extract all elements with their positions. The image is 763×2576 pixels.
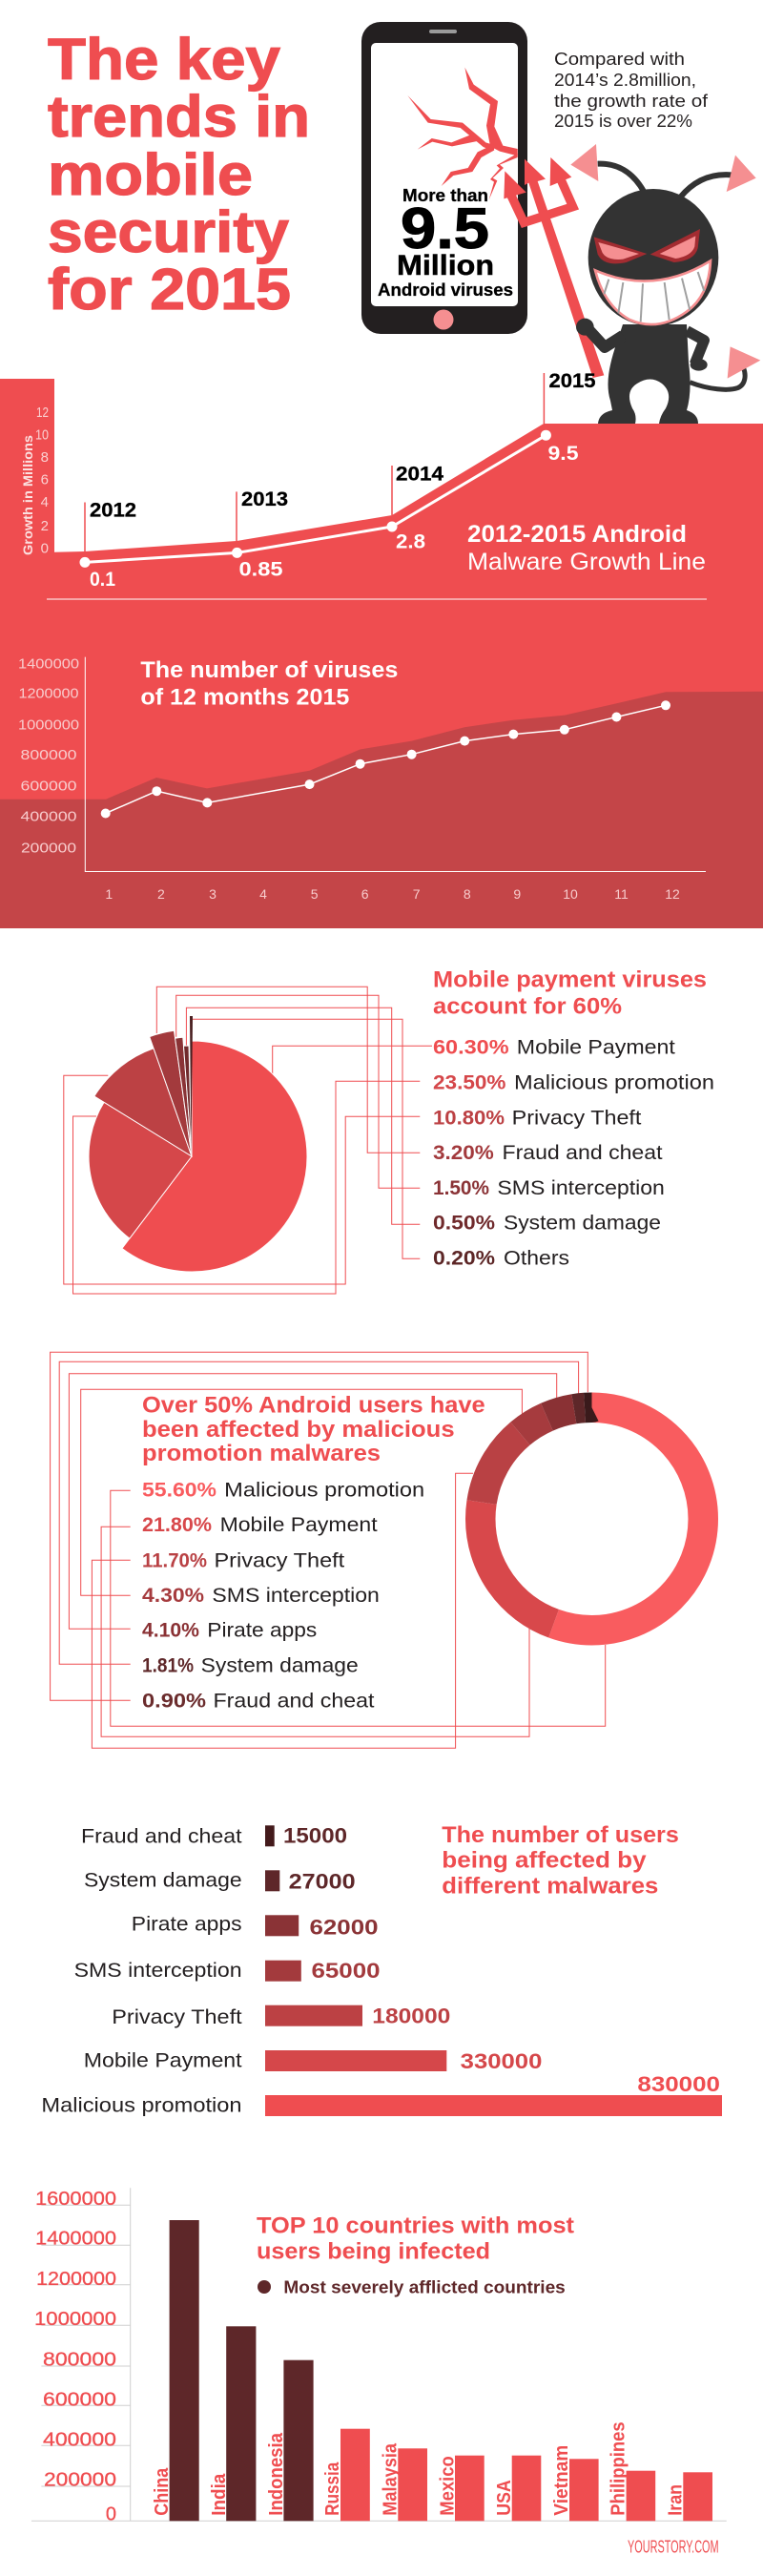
text: more than 9.5 million android viruses: Million [397,250,494,281]
y axis labels: 400000 [43,2429,116,2450]
legend: android users affected: 4.10% [142,1620,199,1642]
bar chart: top 10 infected countries [31,2188,727,2525]
value labels: 9.5 [547,443,579,465]
bar values: 27000 [289,1869,356,1893]
y axis labels [18,656,79,857]
y axis: growth in millions [20,405,49,557]
title: trends in [48,84,310,149]
bar chart: users affected by malware type [41,1824,722,2116]
chart axes [31,2188,727,2521]
heading: malware growth line: 2012-2015 Android [467,521,687,548]
heading: viruses of 12 months: The number of viruses [140,657,398,683]
legend: android users affected: System damage [201,1655,359,1677]
legend: mobile payment viruses: 23.50% [433,1072,506,1094]
legend: android users affected: SMS interception [212,1585,380,1607]
bar labels: System damage [84,1869,242,1891]
value labels: 0.85 [238,559,283,580]
line chart: android malware growth [80,370,596,591]
pie chart: mobile payment viruses [89,1016,307,1272]
y axis labels: 600000 [21,779,76,794]
year labels: 2013 [241,488,288,510]
donut chart: android users affected [481,1407,703,1631]
heading: viruses of 12 months [140,657,398,710]
heading: malware growth line [467,521,706,575]
legend: mobile payment viruses: 60.30% [433,1036,509,1058]
heading: malware growth line: Malware Growth Line [467,549,706,575]
text: more than 9.5 million android viruses: More than [402,186,488,205]
x axis labels: 11 [614,886,629,902]
y axis labels: 1600000 [35,2189,116,2210]
value labels [90,443,579,591]
bar labels: Privacy Theft [112,2006,242,2028]
y axis labels [34,2189,116,2525]
donut chart leader lines [51,1352,606,1748]
x axis labels: 1 [105,886,113,902]
title [48,27,310,322]
bar values: 15000 [283,1824,347,1848]
legend: android users affected: 11.70% [142,1549,207,1571]
bar labels: SMS interception [74,1960,242,1982]
heading: users affected by malware type [442,1822,679,1899]
y axis: growth in millions: 10 [35,427,49,443]
title: security [48,199,289,264]
heading: android users affected: promotion malwares [142,1441,381,1466]
year markers [85,373,544,551]
country labels: China [152,2467,173,2516]
y axis labels: 800000 [43,2349,116,2370]
legend: android users affected [142,1479,424,1712]
growth line [85,435,546,562]
legend: android users affected: Privacy Theft [214,1549,344,1571]
country labels: Indonesia [266,2432,287,2516]
heading: android users affected: been affected by malicious [142,1417,455,1443]
country labels: Mexico [437,2456,458,2516]
axis title: Growth in Millions [20,435,35,555]
devil head [588,189,718,326]
legend: mobile payment viruses: 0.50% [433,1213,495,1235]
bar values: 62000 [309,1916,378,1940]
bar labels: Mobile Payment [84,2049,242,2071]
bar labels: Fraud and cheat [81,1826,242,1848]
x axis labels: 10 [563,886,578,902]
country labels: India [209,2473,230,2516]
text: more than 9.5 million android viruses: 9.5 [401,197,489,260]
heading: users affected by malware type: The number of users [442,1822,679,1848]
x axis labels: 9 [513,886,521,902]
legend: mobile payment viruses: 10.80% [433,1107,505,1129]
legend: most severely afflicted countries: Most severely afflicted countries [283,2277,566,2296]
legend: android users affected: Pirate apps [207,1620,317,1642]
devil body [598,324,698,424]
country labels: Philippines [608,2421,629,2516]
legend: mobile payment viruses [433,1036,714,1269]
bar values: 180000 [372,2005,450,2028]
bar labels: Pirate apps [132,1913,242,1935]
y axis labels: 1000000 [34,2309,116,2330]
y axis labels: 1400000 [18,656,79,672]
country labels: Malaysia [380,2442,401,2516]
legend: mobile payment viruses: 3.20% [433,1142,494,1164]
text: more than 9.5 million android viruses: Android viruses [378,280,513,300]
legend: android users affected: Mobile Payment [220,1514,378,1536]
bar values: 330000 [461,2049,542,2073]
icon: devil with trident [504,144,760,424]
y axis labels: 0 [106,2504,116,2525]
heading: mobile payment viruses: Mobile payment viruses [433,966,707,992]
y axis: growth in millions: 12 [36,405,49,421]
heading: android users affected [142,1393,485,1466]
x axis labels: 3 [209,886,217,902]
y axis: growth in millions: 8 [41,449,49,466]
text: growth rate note: 2015 is over 22% [554,111,692,131]
legend: mobile payment viruses: Fraud and cheat [502,1142,663,1164]
title: mobile [48,142,253,207]
year labels: 2012 [90,500,136,522]
heading: viruses of 12 months: of 12 months 2015 [140,685,349,710]
bar labels [41,1826,242,2116]
title: The key [48,27,280,92]
pie chart leader lines [64,987,432,1294]
year labels: 2015 [549,370,596,392]
legend: android users affected: 21.80% [142,1514,212,1536]
country labels: USA [494,2480,515,2516]
text: growth rate note: 2014’s 2.8million, [554,70,696,90]
country labels: Russia [322,2462,343,2516]
bars [265,1825,275,1846]
y axis labels: 200000 [44,2470,116,2491]
y axis: growth in millions: 2 [41,518,49,534]
bar values [283,1824,720,2096]
text: growth rate note [554,49,709,131]
icon: screen crack [407,68,518,199]
panel: android malware growth background [0,379,763,928]
country bars [170,2220,199,2521]
icon: phone with cracked screen [361,22,527,334]
y axis: growth in millions: 0 [41,540,49,557]
heading: top 10 countries: users being infected [257,2238,490,2264]
legend: mobile payment viruses: Mobile Payment [517,1036,675,1058]
country labels [152,2421,686,2516]
text: growth rate note: Compared with [554,49,685,69]
legend: mobile payment viruses: System damage [504,1213,661,1235]
text: growth rate note: the growth rate of [554,91,709,111]
legend: android users affected: Fraud and cheat [214,1690,375,1712]
heading: top 10 countries [257,2213,574,2264]
y axis: growth in millions: 4 [41,494,49,510]
heading: mobile payment viruses [433,966,707,1020]
devil tail and antennae [690,367,745,389]
y axis labels: 1200000 [36,2269,116,2290]
legend: android users affected: 55.60% [142,1479,217,1501]
legend: android users affected: 1.81% [142,1655,194,1677]
legend: android users affected: 0.90% [142,1690,206,1712]
value labels: 2.8 [396,531,425,553]
legend: mobile payment viruses: Others [504,1247,569,1269]
line chart: viruses of 12 months [18,656,706,902]
year labels [90,370,596,522]
x axis labels [105,886,680,902]
x axis labels: 12 [665,886,680,902]
icon: trident [504,157,604,378]
y axis: growth in millions: 6 [41,471,49,488]
y axis labels: 600000 [43,2389,116,2410]
country labels: Vietnam [551,2445,572,2516]
title: for 2015 [48,257,291,322]
legend: mobile payment viruses: Privacy Theft [512,1107,642,1129]
x axis labels: 6 [361,886,369,902]
y axis labels: 400000 [21,809,76,824]
heading: top 10 countries: TOP 10 countries with most [257,2213,574,2239]
legend: mobile payment viruses: 1.50% [433,1177,489,1199]
data line [106,705,666,813]
year labels: 2014 [396,464,443,486]
heading: users affected by malware type: being affected by [442,1848,647,1874]
country labels: Iran [665,2484,686,2516]
legend: mobile payment viruses: Malicious promotion [514,1072,714,1094]
x axis labels: 4 [259,886,267,902]
legend: android users affected: 4.30% [142,1585,204,1607]
legend: android users affected: Malicious promotion [224,1479,424,1501]
legend: mobile payment viruses: SMS interception [497,1177,665,1199]
x axis labels: 2 [157,886,165,902]
x axis labels: 5 [311,886,319,902]
text: more than 9.5 million android viruses [378,186,513,300]
heading: mobile payment viruses: account for 60% [433,994,622,1020]
y axis labels: 1000000 [18,717,79,733]
y axis labels: 1400000 [35,2229,116,2250]
bar labels: Malicious promotion [41,2094,242,2116]
x axis labels: 7 [413,886,421,902]
legend: mobile payment viruses: 0.20% [433,1247,495,1269]
bar values: 830000 [637,2072,720,2096]
devil grin [595,260,711,324]
y axis labels: 1200000 [19,685,78,702]
x axis labels: 8 [464,886,471,902]
heading: users affected by malware type: different malwares [442,1873,658,1899]
bar values: 65000 [311,1959,380,1983]
value labels: 0.1 [90,569,115,591]
heading: android users affected: Over 50% Android users have [142,1393,485,1419]
devil arms [588,329,623,347]
y axis labels: 200000 [21,840,76,857]
y axis labels: 800000 [21,747,76,763]
